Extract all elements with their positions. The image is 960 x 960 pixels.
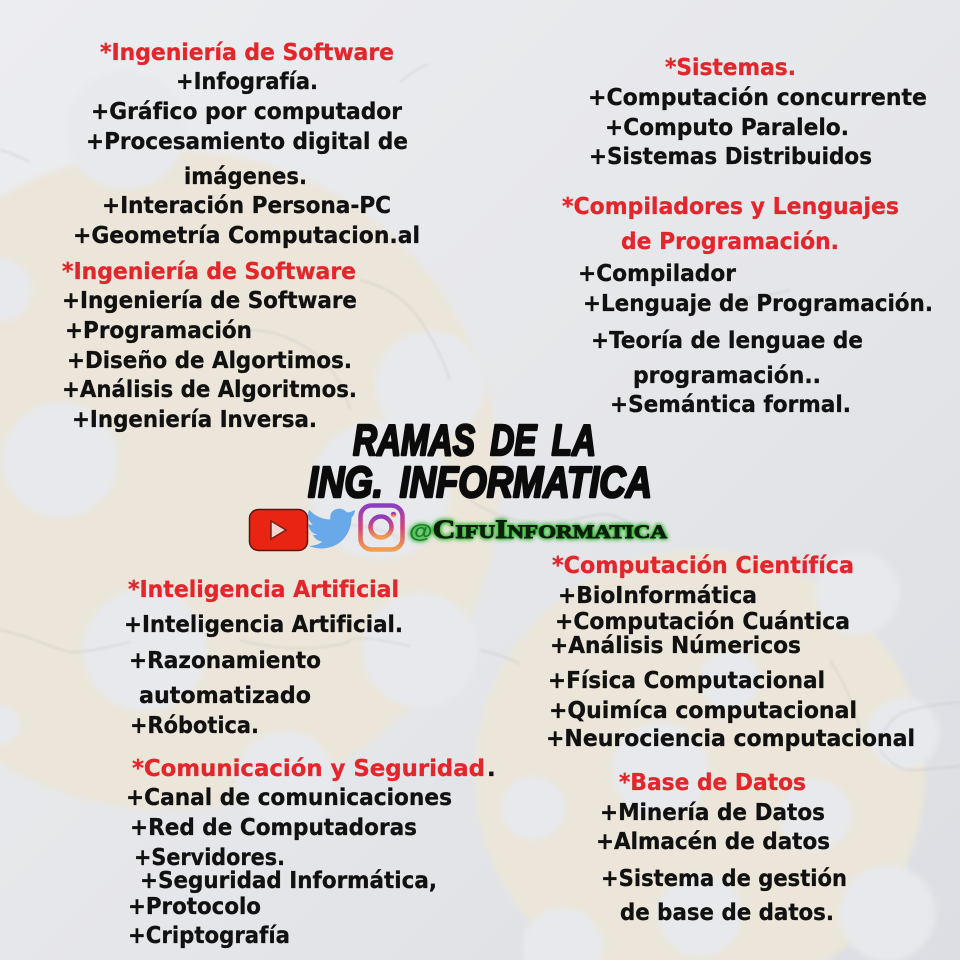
list: inteligencia artificial: +Razonamiento [129, 648, 321, 674]
title [308, 416, 652, 507]
list: sistemas: +Computo Paralelo. [605, 115, 849, 141]
heading: compiladores: *Compiladores y Lenguajes [562, 194, 899, 220]
list: compiladores: +Semántica formal. [610, 392, 851, 418]
heading: ingeniería de software 2: *Ingeniería de Software [62, 259, 356, 285]
list: comunicación: +Seguridad Informática, [140, 868, 437, 894]
panel: inteligencia artificial [124, 577, 403, 739]
panel: ingeniería de software [62, 259, 357, 433]
title: ING. INFORMATICA [308, 458, 652, 507]
list: software: +Análisis de Algoritmos. [62, 377, 357, 403]
heading: sistemas: *Sistemas. [665, 55, 796, 81]
list: compiladores: +Teoría de lenguae de [591, 328, 863, 354]
list: gráficos: +Geometría Computacion.al [73, 223, 420, 249]
list: computación científica: +BioInformática [558, 583, 757, 609]
list: base de datos: de base de datos. [620, 900, 834, 926]
list: base de datos: +Almacén de datos [596, 829, 830, 855]
list: gráficos [73, 69, 420, 249]
panel: comunicación y seguridad [126, 756, 496, 949]
list: sistemas: +Computación concurrente [588, 85, 927, 111]
list: compiladores: programación.. [633, 363, 821, 389]
list: inteligencia artificial: automatizado [139, 683, 311, 709]
list: compiladores: +Compilador [578, 261, 737, 287]
panel: base de datos [596, 770, 847, 926]
icon: twitter [308, 509, 355, 548]
list: gráficos: imágenes. [184, 164, 307, 190]
heading: base de datos: *Base de Datos [619, 770, 806, 796]
list: gráficos: +Infografía. [176, 69, 318, 95]
list: computación científica [546, 583, 915, 752]
list: comunicación: +Servidores. [134, 845, 285, 871]
list: software: +Diseño de Algortimos. [67, 348, 352, 374]
list: gráficos: +Gráfico por computador [91, 99, 403, 125]
list: computación científica: +Análisis Númericos [550, 633, 801, 659]
list: compiladores [578, 261, 933, 418]
list: base de datos: +Sistema de gestión [601, 866, 847, 892]
list: gráficos: +Procesamiento digital de [86, 129, 408, 155]
list: computación científica: +Neurociencia computacional [546, 726, 915, 752]
list: base de datos: +Minería de Datos [600, 800, 825, 826]
panel: compiladores [562, 194, 933, 418]
list: computación científica: +Quimíca computacional [549, 698, 857, 724]
list: sistemas [588, 85, 927, 170]
list: comunicación: +Red de Computadoras [130, 815, 417, 841]
heading: inteligencia artificial: *Inteligencia Artificial [128, 577, 399, 603]
list: gráficos: +Interación Persona-PC [102, 193, 391, 219]
title: RAMAS DE LA [353, 416, 596, 465]
list: comunicación [126, 756, 496, 949]
list: computación científica: +Física Computacional [548, 668, 825, 694]
list: comunicación: +Canal de comunicaciones [126, 785, 452, 811]
panel: gráficos [73, 40, 420, 249]
list: software: +Ingeniería Inversa. [72, 407, 317, 433]
list: computación científica: +Computación Cuántica [555, 609, 850, 635]
panel: computación científica [546, 553, 915, 752]
icon: youtube [250, 510, 308, 550]
list: comunicación: . [487, 756, 496, 782]
heading: comunicación y seguridad: *Comunicación y Seguridad [132, 756, 485, 782]
list: comunicación: +Criptografía [128, 923, 290, 949]
list: inteligencia artificial [124, 612, 403, 739]
panel: sistemas [588, 55, 927, 170]
list: base de datos [596, 800, 847, 926]
heading: ingeniería de software 1: *Ingeniería de Software [100, 40, 394, 66]
heading: compiladores: de Programación. [621, 229, 839, 255]
social row [250, 506, 667, 550]
social handle: @CIFU INFORMATICA [409, 515, 667, 544]
list: inteligencia artificial: +Róbotica. [130, 713, 259, 739]
heading: computación científica: *Computación Científíca [552, 553, 854, 579]
list: software: +Ingeniería de Software [62, 288, 357, 314]
icon: instagram [360, 506, 402, 550]
list: inteligencia artificial: +Inteligencia Artificial. [124, 612, 403, 638]
list: compiladores: +Lenguaje de Programación. [583, 291, 933, 317]
list: software: +Programación [65, 318, 252, 344]
list: sistemas: +Sistemas Distribuidos [589, 144, 872, 170]
list: software [62, 288, 357, 433]
heading: compiladores [562, 194, 899, 255]
list: comunicación: +Protocolo [128, 894, 261, 920]
